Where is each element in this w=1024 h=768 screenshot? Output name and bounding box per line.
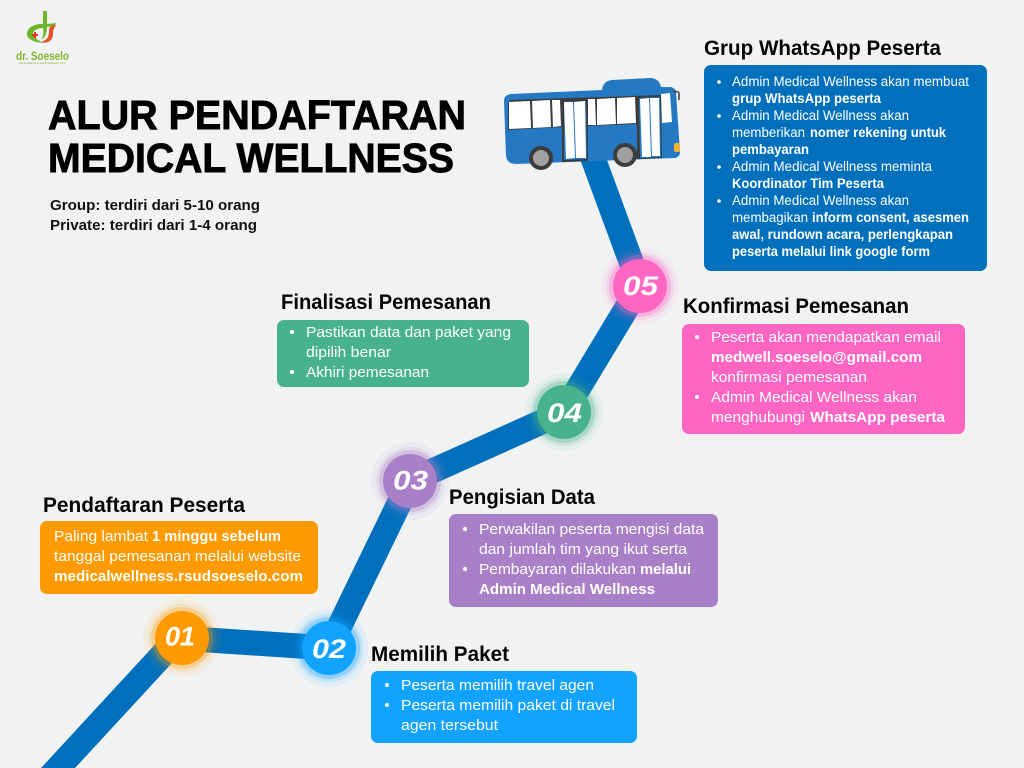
panel: konfirmasi pemesanan: Peserta akan mendapatkan email bbox=[711, 329, 941, 346]
heading: pengisian data: Pengisian Data bbox=[449, 486, 595, 509]
panel: finalisasi pemesanan: Akhiri pemesanan bbox=[306, 364, 429, 381]
panel: pendaftaran peserta bbox=[40, 494, 318, 594]
panel: pendaftaran peserta: 1 minggu sebelum bbox=[152, 528, 281, 545]
step marker 04: 04 bbox=[547, 398, 582, 428]
heading: pendaftaran peserta: Pendaftaran Peserta bbox=[43, 494, 245, 517]
panel: grup whatsapp peserta bbox=[704, 37, 987, 271]
step marker 02 bbox=[290, 609, 368, 687]
title: MEDICAL WELLNESS bbox=[48, 135, 454, 181]
title bbox=[48, 92, 466, 181]
panel: konfirmasi pemesanan: menghubungi bbox=[711, 409, 805, 426]
heading: memilih paket: Memilih Paket bbox=[371, 643, 509, 666]
panel: grup whatsapp peserta: inform consent, asesmen bbox=[812, 210, 969, 225]
panel: finalisasi pemesanan: dipilih benar bbox=[306, 344, 391, 361]
group size notes: Private: terdiri dari 1-4 orang bbox=[50, 217, 257, 234]
panel: pengisian data bbox=[449, 486, 718, 607]
heading: finalisasi pemesanan: Finalisasi Pemesanan bbox=[281, 291, 491, 314]
icon: bus bbox=[504, 78, 680, 170]
title: ALUR PENDAFTARAN bbox=[48, 92, 466, 138]
panel: grup whatsapp peserta: Admin Medical Wellness akan bbox=[732, 108, 909, 123]
panel: grup whatsapp peserta: Admin Medical Wellness akan membuat bbox=[732, 74, 969, 89]
panel: finalisasi pemesanan bbox=[277, 291, 529, 387]
panel: konfirmasi pemesanan: WhatsApp peserta bbox=[810, 409, 946, 426]
step marker 03 bbox=[371, 442, 449, 520]
panel: memilih paket: agen tersebut bbox=[401, 717, 499, 734]
panel: konfirmasi pemesanan: Admin Medical Wellness akan bbox=[711, 389, 917, 406]
panel: konfirmasi pemesanan: medwell.soeselo@gmail.com bbox=[711, 349, 922, 366]
panel: finalisasi pemesanan: Pastikan data dan paket yang bbox=[306, 324, 511, 341]
panel: pengisian data: dan jumlah tim yang ikut serta bbox=[479, 541, 688, 558]
panel: pengisian data: Perwakilan peserta mengisi data bbox=[479, 521, 705, 538]
panel: pendaftaran peserta: tanggal pemesanan melalui website bbox=[54, 548, 301, 565]
step marker 02: 02 bbox=[312, 634, 346, 664]
panel: memilih paket bbox=[371, 643, 637, 743]
panel: grup whatsapp peserta: Koordinator Tim Peserta bbox=[732, 176, 885, 191]
panel: grup whatsapp peserta: Admin Medical Wellness meminta bbox=[732, 159, 933, 174]
route line bbox=[47, 150, 640, 768]
panel: pendaftaran peserta: Paling lambat bbox=[54, 528, 149, 545]
panel: grup whatsapp peserta: memberikan bbox=[732, 125, 805, 140]
panel: pendaftaran peserta: medicalwellness.rsudsoeselo.com bbox=[54, 568, 303, 585]
logo: dr. Soeselo bbox=[16, 11, 69, 65]
panel: konfirmasi pemesanan bbox=[682, 295, 965, 434]
panel: grup whatsapp peserta: membagikan bbox=[732, 210, 808, 225]
panel: pengisian data: melalui bbox=[640, 561, 691, 578]
logo: dr. Soeselo: dr. Soeselo bbox=[16, 49, 69, 63]
panel: memilih paket: Peserta memilih paket di travel bbox=[401, 697, 615, 714]
panel: grup whatsapp peserta: Admin Medical Wellness akan bbox=[732, 193, 909, 208]
group size notes: Group: terdiri dari 5-10 orang bbox=[50, 197, 260, 214]
heading: grup whatsapp peserta: Grup WhatsApp Peserta bbox=[704, 37, 941, 60]
panel: grup whatsapp peserta: nomer rekening untuk bbox=[810, 125, 947, 140]
step marker 05: 05 bbox=[623, 271, 659, 301]
step marker 05 bbox=[601, 247, 679, 325]
panel: konfirmasi pemesanan: konfirmasi pemesanan bbox=[711, 369, 867, 386]
group size notes bbox=[50, 197, 260, 234]
step marker 01 bbox=[143, 599, 221, 677]
panel: pengisian data: Admin Medical Wellness bbox=[479, 581, 655, 598]
panel: grup whatsapp peserta: pembayaran bbox=[732, 142, 809, 157]
panel: grup whatsapp peserta: peserta melalui link google form bbox=[732, 244, 930, 259]
step marker 01: 01 bbox=[165, 622, 195, 652]
panel: grup whatsapp peserta: awal, rundown acara, perlengkapan bbox=[732, 227, 953, 242]
panel: grup whatsapp peserta: grup WhatsApp peserta bbox=[732, 91, 882, 106]
heading: konfirmasi pemesanan: Konfirmasi Pemesanan bbox=[683, 295, 909, 318]
step marker 03: 03 bbox=[393, 466, 428, 496]
step marker 04 bbox=[525, 373, 603, 451]
panel: memilih paket: Peserta memilih travel agen bbox=[401, 677, 594, 694]
logo: dr. Soeselo: Rumah Sakit Umum Daerah Kabupaten Tegal bbox=[19, 61, 65, 65]
panel: pengisian data: Pembayaran dilakukan bbox=[479, 561, 636, 578]
